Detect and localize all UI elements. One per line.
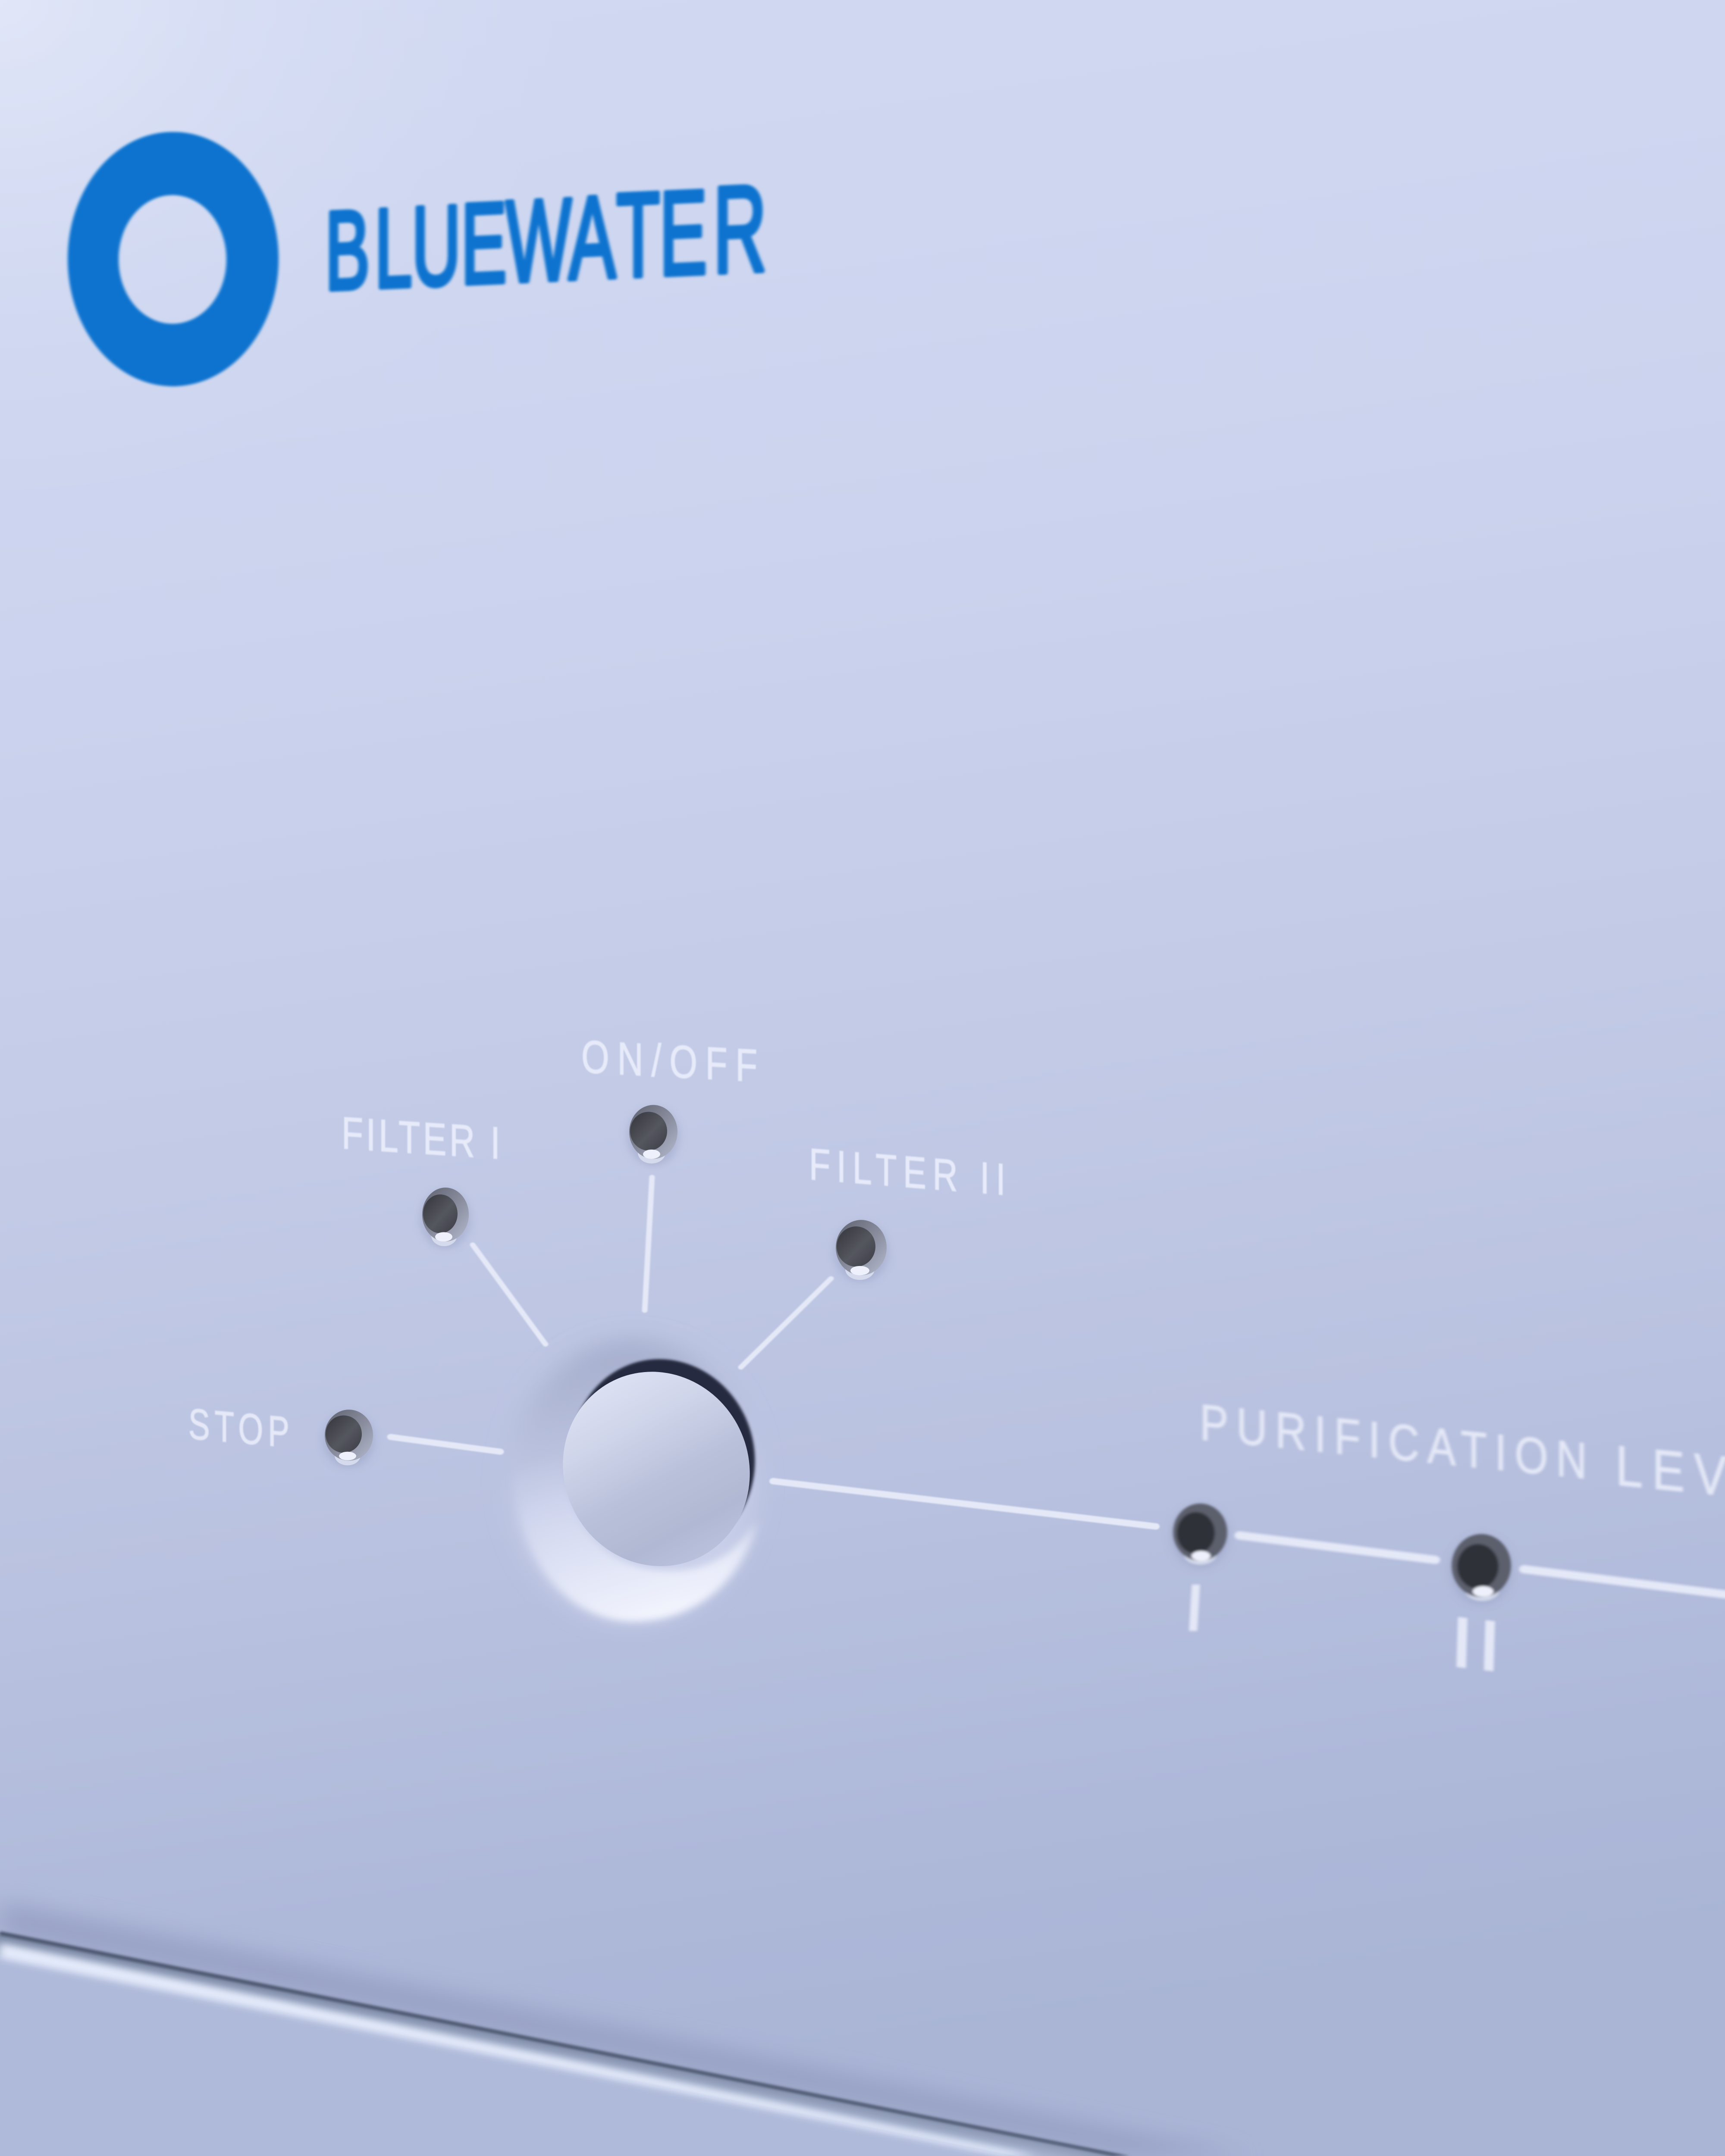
logo wordmark: W (506, 174, 571, 306)
level numeral II: II (1449, 1601, 1506, 1687)
ON/OFF label: ON/OFF (581, 1031, 757, 1092)
LED: FILTER II (834, 1220, 888, 1282)
brand logo (68, 132, 766, 386)
level connector lines (1239, 1536, 1725, 1595)
logo wordmark: R (713, 159, 766, 299)
PURIFICATION LEVEL label (1200, 1394, 1725, 1516)
LED: level I (1172, 1504, 1229, 1568)
logo wordmark: A (569, 171, 616, 304)
button recess (512, 1340, 765, 1621)
logo wordmark: U (412, 182, 461, 310)
LED: STOP (323, 1410, 375, 1467)
logo wordmark: E (461, 179, 507, 308)
panel seam groove (0, 1901, 1251, 2156)
LED: level II (1450, 1534, 1512, 1604)
STOP label: STOP (188, 1399, 289, 1457)
control cluster (188, 1031, 1156, 1621)
logo ring icon (68, 132, 279, 386)
level numeral I: I (1181, 1571, 1208, 1645)
push button (552, 1364, 761, 1574)
logo wordmark: L (375, 185, 412, 311)
purification level section (1172, 1394, 1725, 1687)
LED: FILTER I (420, 1188, 470, 1248)
FILTER I label: FILTER I (342, 1108, 500, 1169)
FILTER II label: FILTER II (809, 1139, 1006, 1204)
logo wordmark: B (325, 187, 370, 313)
logo wordmark: E (659, 165, 707, 301)
connector lines (391, 1177, 1156, 1526)
logo wordmark: T (616, 167, 660, 303)
PURIFICATION LEVEL label: PURIFICATION (1200, 1394, 1587, 1490)
LED: ON/OFF (627, 1105, 679, 1166)
